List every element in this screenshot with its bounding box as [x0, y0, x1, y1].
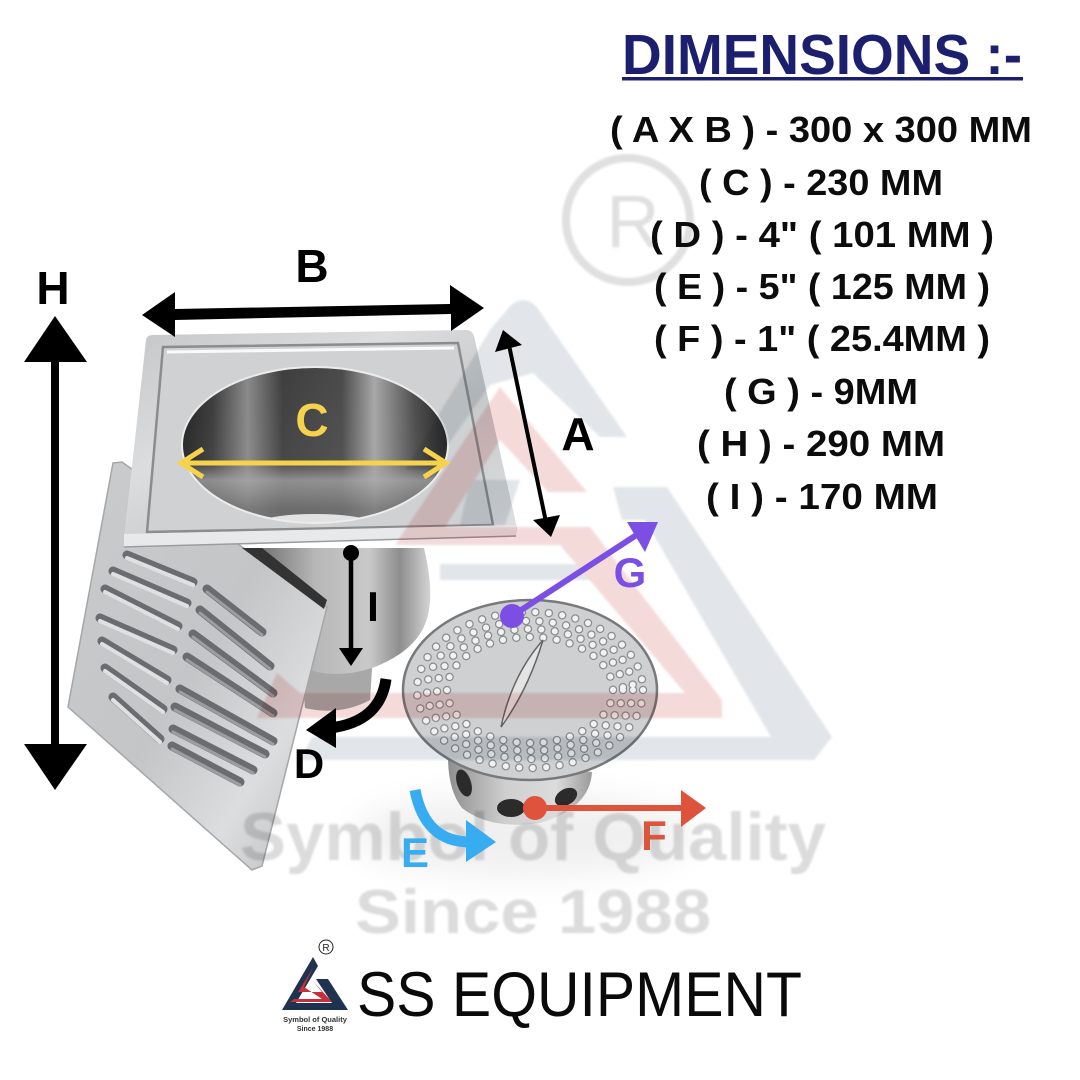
brand logo: Since 1988: [297, 1026, 333, 1033]
strainer ground shadow: [355, 793, 695, 877]
slotted grate cover: [68, 462, 327, 870]
label: E: E: [401, 829, 429, 876]
plate hole: [180, 365, 450, 532]
dimensions list: ( D ) - 4" ( 101 MM ): [650, 214, 994, 255]
dimension arrow: B: [142, 285, 484, 337]
watermark: logo and tagline: [240, 158, 832, 947]
watermark: red stripe: [257, 387, 722, 718]
dimension arrow: A: [495, 330, 560, 537]
dimension arrow: G: [500, 522, 658, 628]
heading: dimensions: DIMENSIONS :-: [622, 23, 1022, 87]
dimension arrow: F: [523, 790, 706, 827]
strainer disc: [403, 600, 657, 780]
watermark: registered symbol: R: [606, 180, 660, 263]
label: C: C: [295, 394, 329, 446]
dimensions list: ( A X B ) - 300 x 300 MM: [610, 109, 1032, 150]
dimension arrow: I: [339, 545, 363, 666]
watermark: Since 1988: Since 1988: [355, 878, 711, 947]
top square plate: [124, 330, 517, 548]
watermark: registered symbol: [566, 158, 690, 282]
dimension arrow: H: [24, 316, 87, 790]
dimensions list: ( G ) - 9MM: [724, 371, 918, 412]
strainer handle: [501, 640, 543, 727]
logo: registered mark: R: [322, 943, 330, 954]
dimensions list: ( F ) - 1" ( 25.4MM ): [654, 318, 990, 359]
label: D: D: [294, 740, 324, 787]
watermark: grey triangle: [300, 300, 832, 760]
label: I: I: [367, 583, 379, 630]
logo: triangle mark: [282, 957, 348, 1010]
label: H: H: [36, 262, 70, 314]
logo: tagline: Symbol of Quality: [283, 1015, 348, 1024]
dimensions list: ( E ) - 5" ( 125 MM ): [654, 266, 990, 307]
label: G: G: [614, 549, 646, 596]
dimensions list: ( I ) - 170 MM: [706, 476, 938, 517]
dimension arrow: D: [306, 679, 386, 748]
label: B: B: [295, 240, 329, 292]
strainer perforations: [417, 612, 643, 768]
watermark: Symbol of Quality: Symbol of Quality: [240, 799, 826, 875]
grate slots: [100, 555, 273, 782]
brand name: SS EQUIPMENT: [357, 960, 802, 1030]
label: A: A: [561, 408, 595, 460]
dimensions list: ( C ) - 230 MM: [699, 162, 943, 203]
dimensions list: ( H ) - 290 MM: [697, 423, 945, 464]
strainer cup: [448, 757, 592, 825]
dimensions list: [610, 109, 1032, 517]
strainer basket: [403, 600, 657, 825]
label: F: F: [641, 812, 667, 859]
drain body: [240, 548, 430, 711]
dimension arrow: E: [415, 790, 496, 862]
brand logo: [282, 940, 348, 1033]
dimension arrow: C: [181, 449, 446, 477]
